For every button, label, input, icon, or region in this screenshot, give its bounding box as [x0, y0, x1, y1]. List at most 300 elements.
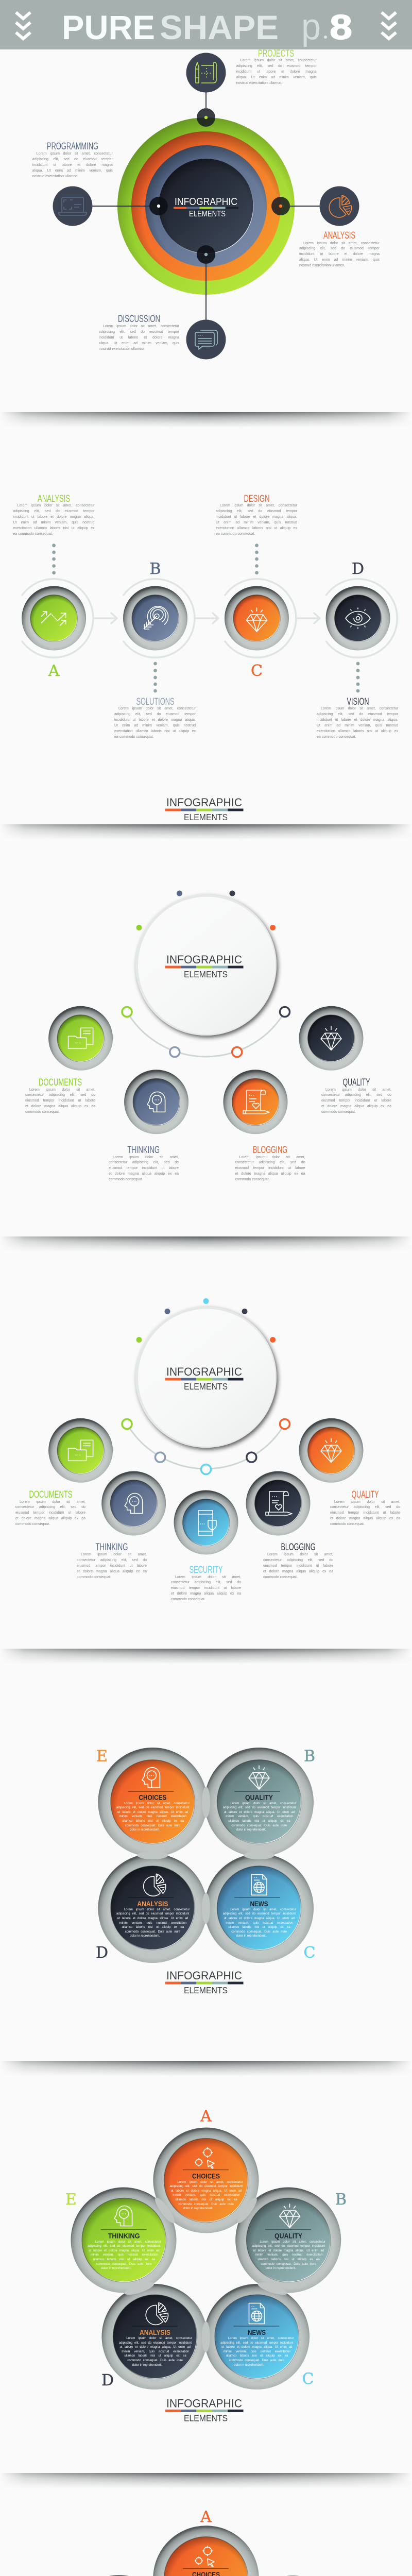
dotted connector D	[356, 662, 359, 692]
text: projects: nostrud exercitation ullamco.	[236, 81, 282, 85]
letter E: E	[96, 1748, 108, 1765]
marker dots	[136, 1298, 276, 1343]
heading: solutions: SOLUTIONS	[136, 697, 174, 707]
text: quality: Lorem ipsum dolor sit amet,	[325, 1088, 391, 1091]
text: analysis: commodo consequat. Duis aute irure	[125, 1930, 180, 1934]
text: thinking: et dolore magna aliqua aliquip ex ea	[77, 1570, 147, 1573]
icon node: programming	[53, 187, 93, 226]
text: design: adipiscing elit, sed do eiusmod tempor	[216, 510, 297, 513]
text: documents	[15, 1500, 85, 1526]
text: projects	[236, 59, 317, 85]
letter D: D	[101, 2371, 114, 2389]
text: analysis: Lorem ipsum dolor sit amet, consectetur	[18, 504, 95, 507]
circle: security	[174, 1490, 238, 1555]
text: choices: ut labore et dolore magna aliqua. Ut enim ad	[171, 2190, 242, 2193]
text: programming: Lorem ipsum dolor sit amet, consectetur	[37, 152, 113, 156]
text: analysis: exercitation ullamco laboris nisi ut aliquip ex	[13, 527, 95, 530]
text: blogging: eiusmod tempor incididunt ut labore	[263, 1564, 333, 1568]
text: security: eiusmod tempor incididunt ut labore	[171, 1586, 241, 1590]
panel: four joined circles: Lorem ipsum dolor sit amet, consectetur	[230, 1908, 296, 1911]
text: thinking	[88, 2240, 161, 2270]
text: news: minim veniam, quis nostrud exercitation	[226, 1922, 293, 1925]
text: analysis	[299, 241, 380, 267]
text: solutions	[114, 707, 196, 739]
text: documents	[25, 1088, 95, 1114]
letter D: D	[96, 1944, 108, 1962]
text: documents: commodo consequat.	[25, 1110, 60, 1114]
text: choices: commodo consequat. Duis aute irure	[178, 2203, 234, 2206]
circle: choices	[164, 2537, 248, 2576]
text: design: ea commodo consequat.	[216, 532, 255, 536]
joined ring frame	[98, 1748, 314, 1963]
step C circle	[225, 579, 296, 657]
logo: ELEMENTS	[184, 812, 228, 822]
text: thinking: commodo consequat.	[109, 1178, 143, 1181]
letter B: B	[149, 560, 161, 578]
heading: security: SECURITY	[190, 1565, 223, 1575]
circle: thinking: THINKING	[108, 2232, 140, 2240]
text: news: ullamco laboris nisi ut aliquip ex ea	[228, 1926, 290, 1929]
circle: quality: QUALITY	[245, 1793, 273, 1802]
text: news: commodo consequat. Duis aute irure	[231, 1930, 287, 1934]
text: documents: Lorem ipsum dolor sit amet,	[20, 1500, 85, 1503]
circle: documents	[48, 1418, 113, 1483]
title: SHAPE	[160, 8, 279, 46]
text: choices: ut labore et dolore magna aliqua. Ut enim ad	[117, 1811, 188, 1814]
icon: right chevrons	[382, 12, 396, 39]
heading: discussion: DISCUSSION	[118, 314, 160, 325]
text: blogging: eiusmod tempor incididunt ut labore	[235, 1166, 305, 1170]
text: security: et dolore magna aliqua aliquip ex ea	[171, 1592, 241, 1596]
heading: design: DESIGN	[244, 494, 270, 504]
heading: documents: DOCUMENTS	[39, 1077, 82, 1088]
text: quality: adipiscing elit, sed do eiusmod tempor incididunt	[223, 1806, 296, 1809]
text: solutions: Lorem ipsum dolor sit amet, consectetur	[118, 707, 196, 710]
text: choices: commodo consequat. Duis aute irure	[125, 1824, 180, 1827]
circle: quality	[217, 1760, 301, 1844]
heading: analysis: ANALYSIS	[38, 494, 70, 504]
heading: documents: DOCUMENTS	[29, 1489, 72, 1500]
text: thinking: et dolore magna aliqua aliquip ex ea	[109, 1172, 179, 1176]
text: quality: ut labore et dolore magna aliqua. Ut enim ad	[253, 2249, 324, 2252]
text: analysis: adipiscing elit, sed do eiusmod tempor incididunt	[116, 1912, 189, 1916]
text: blogging	[263, 1553, 333, 1579]
text: documents: consectetur adipiscing elit, sed do	[25, 1093, 95, 1097]
text: news: adipiscing elit, sed do eiusmod tempor incididunt	[220, 2342, 294, 2345]
circle: blogging	[246, 1471, 310, 1535]
arc rings	[122, 1419, 289, 1475]
circle: quality	[299, 1006, 364, 1071]
connector lines	[92, 92, 320, 320]
text: news: ut labore et dolore magna aliqua. Ut enim ad	[221, 2346, 293, 2349]
text: security	[171, 1575, 241, 1601]
letter C: C	[302, 2370, 314, 2388]
logo	[165, 796, 243, 822]
text: security: Lorem ipsum dolor sit amet,	[175, 1575, 241, 1579]
text: quality: commodo consequat. Duis aute irure	[261, 2263, 316, 2266]
circle: choices: CHOICES	[192, 2172, 220, 2180]
arrow A to B	[94, 613, 117, 623]
heading: projects: PROJECTS	[258, 48, 294, 59]
text: blogging: consectetur adipiscing elit, sed do	[235, 1161, 305, 1164]
text: choices: minim veniam, quis nostrud exercitation	[119, 1815, 186, 1818]
circle: choices: CHOICES	[139, 1793, 166, 1802]
text: quality: ullamco laboris nisi ut aliquip ex ea	[228, 1820, 290, 1823]
text: programming: incididunt ut labore et dolore magna	[32, 163, 113, 167]
panel: four joined circles: dolor in reprehenderit.	[236, 1935, 266, 1938]
text: analysis: incididunt ut labore et dolore magna aliqua.	[13, 515, 95, 519]
circle: thinking	[124, 1070, 188, 1134]
text: analysis: minim veniam, quis nostrud exercitation	[122, 2350, 189, 2353]
icon node: projects	[186, 53, 226, 93]
text: programming	[32, 151, 113, 178]
title: p	[301, 7, 321, 47]
text: discussion	[99, 325, 179, 351]
text: projects: adipiscing elit, sed do eiusmod tempor	[236, 64, 317, 68]
letter B: B	[335, 2191, 347, 2209]
logo	[165, 1365, 243, 1392]
text: solutions: exercitation ullamco laboris nisi ut aliquip ex	[114, 730, 196, 733]
icon node: analysis	[319, 187, 359, 226]
panel: five joined circles: Lorem ipsum dolor sit amet, consectetur	[260, 2240, 325, 2243]
text: quality: commodo consequat.	[330, 1522, 365, 1526]
text: quality: ullamco laboris nisi ut aliquip ex ea	[258, 2258, 320, 2261]
text: analysis: commodo consequat. Duis aute irure	[127, 2359, 183, 2362]
text: blogging: Lorem ipsum dolor sit amet,	[267, 1553, 333, 1556]
logo: INFOGRAPHIC	[166, 2397, 242, 2410]
connecting arc	[127, 1424, 285, 1469]
marker dots	[136, 890, 276, 930]
text: solutions: ea commodo consequat.	[114, 735, 154, 739]
heading: quality: QUALITY	[351, 1489, 379, 1500]
circle: news: NEWS	[250, 1900, 268, 1908]
text: vision: exercitation ullamco laboris nisi ut aliquip ex	[317, 730, 398, 733]
text: thinking: commodo consequat. Duis aute irure	[96, 2263, 152, 2266]
text: analysis: ullamco laboris nisi ut aliquip ex ea	[124, 2354, 186, 2358]
text: projects: Lorem ipsum dolor sit amet, consectetur	[241, 59, 317, 62]
panel: four joined circles	[3, 1649, 409, 1995]
circle: thinking	[82, 2198, 166, 2282]
text: security: consectetur adipiscing elit, sed do	[171, 1581, 241, 1584]
text: solutions: incididunt ut labore et dolore magna aliqua.	[114, 718, 196, 722]
text: analysis: nostrud exercitation ullamco.	[299, 264, 345, 267]
joined ring frame	[66, 2526, 346, 2576]
text: design: Ut enim ad minim veniam, quis nostrud	[216, 521, 297, 524]
panel: four joined circles: Lorem ipsum dolor sit amet, consectetur	[230, 1802, 296, 1805]
letter D: D	[352, 560, 364, 578]
text: thinking	[109, 1155, 179, 1181]
text: documents: eiusmod tempor incididunt ut labore	[25, 1099, 95, 1103]
text: quality: commodo consequat.	[321, 1110, 356, 1114]
text: blogging: Lorem ipsum dolor sit amet,	[239, 1155, 305, 1159]
center logo: ELEMENTS	[189, 210, 226, 218]
step D circle	[325, 579, 397, 657]
circle: documents	[48, 1006, 113, 1071]
letter A: A	[200, 2107, 212, 2126]
text: quality: Lorem ipsum dolor sit amet,	[334, 1500, 400, 1503]
letter A: A	[48, 662, 60, 680]
logo: ELEMENTS	[184, 1985, 228, 1995]
panel: four joined circles: dolor in reprehenderit.	[130, 1935, 160, 1938]
heading: quality: QUALITY	[343, 1077, 370, 1088]
text: news: ut labore et dolore magna aliqua. Ut enim ad	[224, 1917, 295, 1920]
text: blogging: commodo consequat.	[235, 1178, 270, 1181]
text: vision: adipiscing elit, sed do eiusmod tempor	[317, 713, 398, 716]
heading: thinking: THINKING	[127, 1145, 160, 1156]
text: documents: Lorem ipsum dolor sit amet,	[29, 1088, 95, 1091]
letter C: C	[251, 662, 263, 680]
text: thinking: ullamco laboris nisi ut aliquip ex ea	[93, 2258, 155, 2261]
text: thinking	[77, 1553, 147, 1579]
heading: programming: PROGRAMMING	[47, 141, 98, 152]
text: thinking: consectetur adipiscing elit, sed do	[109, 1161, 179, 1164]
circle: thinking	[101, 1471, 166, 1535]
text: analysis: adipiscing elit, sed do eiusmod tempor	[299, 247, 380, 250]
circle: analysis: ANALYSIS	[140, 2328, 170, 2336]
text: quality: et dolore magna aliqua aliquip ex ea	[321, 1105, 391, 1108]
text: news	[222, 1908, 296, 1938]
panel: six joined circles	[3, 2473, 409, 2576]
text: solutions: adipiscing elit, sed do eiusmod tempor	[114, 713, 196, 716]
text: documents: commodo consequat.	[15, 1522, 50, 1526]
text: choices	[170, 2180, 243, 2210]
text: discussion: Lorem ipsum dolor sit amet, consectetur	[103, 325, 179, 328]
panel: five joined circles: dolor in reprehenderit.	[183, 2207, 213, 2210]
text: programming: aliqua. Ut enim ad minim veniam, quis	[32, 169, 113, 173]
text: thinking: minim veniam, quis nostrud exercitation	[91, 2253, 158, 2257]
heading: blogging: BLOGGING	[281, 1542, 315, 1553]
central disk	[135, 894, 277, 1036]
text: quality: minim veniam, quis nostrud exercitation	[255, 2253, 322, 2257]
text: analysis: adipiscing elit, sed do eiusmod tempor	[13, 510, 95, 513]
text: quality: et dolore magna aliqua aliquip ex ea	[330, 1517, 400, 1520]
text: programming: nostrud exercitation ullamco.	[32, 175, 78, 178]
text: quality: commodo consequat. Duis aute irure	[231, 1824, 287, 1827]
panel: four joined circles: Lorem ipsum dolor sit amet, consectetur	[124, 1908, 190, 1911]
text: blogging: et dolore magna aliqua aliquip ex ea	[235, 1172, 305, 1176]
text: analysis: Ut enim ad minim veniam, quis nostrud	[13, 521, 95, 524]
text: documents: eiusmod tempor incididunt ut labore	[15, 1511, 85, 1515]
text: thinking: Lorem ipsum dolor sit amet,	[81, 1553, 147, 1556]
text: design: incididunt ut labore et dolore magna aliqua.	[216, 515, 297, 519]
dotted connector A	[52, 544, 56, 574]
logo	[165, 2397, 243, 2423]
text: quality: ut labore et dolore magna aliqua. Ut enim ad	[224, 1811, 295, 1814]
text: news: minim veniam, quis nostrud exercitation	[224, 2350, 290, 2353]
text: thinking: eiusmod tempor incididunt ut labore	[77, 1564, 147, 1568]
circle: news: NEWS	[248, 2328, 266, 2336]
node: left	[149, 197, 168, 215]
logo: ELEMENTS	[184, 2413, 228, 2423]
center logo: INFOGRAPHIC	[175, 196, 237, 208]
circle: choices	[164, 2138, 248, 2223]
text: quality	[321, 1088, 391, 1114]
panel: five joined circles: Lorem ipsum dolor sit amet, consectetur	[95, 2240, 161, 2243]
dotted connector C	[255, 544, 259, 574]
text: discussion: incididunt ut labore et dolore magna	[99, 336, 179, 340]
panel: five joined circles: dolor in reprehenderit.	[101, 2267, 131, 2270]
node: top	[197, 108, 215, 127]
text: thinking: commodo consequat.	[77, 1575, 111, 1579]
text: discussion: adipiscing elit, sed do eiusmod tempor	[99, 330, 179, 334]
text: analysis	[116, 1908, 190, 1938]
letter B: B	[304, 1748, 315, 1765]
text: blogging	[235, 1155, 305, 1181]
panel: five joined circles: Lorem ipsum dolor sit amet, consectetur	[177, 2180, 243, 2183]
text: security: commodo consequat.	[171, 1598, 205, 1601]
circle: analysis: ANALYSIS	[137, 1900, 168, 1908]
text: design: exercitation ullamco laboris nisi ut aliquip ex	[216, 527, 297, 530]
text: blogging: consectetur adipiscing elit, sed do	[263, 1558, 333, 1562]
circle: analysis	[113, 2295, 197, 2379]
panel: five joined circles: dolor in reprehenderit.	[234, 2364, 264, 2367]
text: choices: adipiscing elit, sed do eiusmod tempor incididunt	[116, 1806, 189, 1809]
icon: left chevrons	[16, 12, 30, 39]
node: bottom	[197, 245, 215, 264]
panel: five joined circles: Lorem ipsum dolor sit amet, consectetur	[228, 2337, 294, 2340]
title	[62, 7, 352, 47]
logo	[165, 953, 243, 979]
text: news	[220, 2337, 294, 2367]
circle: quality	[299, 1418, 364, 1483]
text: analysis	[13, 504, 95, 536]
dotted connector B	[153, 662, 157, 692]
letter C: C	[304, 1944, 315, 1962]
text: quality: consectetur adipiscing elit, sed do	[330, 1505, 400, 1509]
step A circle	[22, 579, 93, 657]
text: thinking: Lorem ipsum dolor sit amet,	[113, 1155, 179, 1159]
text: blogging: et dolore magna aliqua aliquip ex ea	[263, 1570, 333, 1573]
panel: four item arc	[3, 824, 409, 1181]
text: news: ullamco laboris nisi ut aliquip ex ea	[226, 2354, 288, 2358]
logo	[165, 1969, 243, 1995]
circle: blogging	[224, 1070, 287, 1134]
text: projects: aliqua. Ut enim ad minim veniam, quis	[236, 76, 317, 79]
text: choices: ullamco laboris nisi ut aliquip ex ea	[122, 1820, 184, 1823]
text: thinking: consectetur adipiscing elit, sed do	[77, 1558, 147, 1562]
text: vision: ea commodo consequat.	[317, 735, 356, 739]
text: analysis: ut labore et dolore magna aliqua. Ut enim ad	[117, 1917, 188, 1920]
text: vision: incididunt ut labore et dolore magna aliqua.	[317, 718, 398, 722]
text: analysis: ut labore et dolore magna aliqua. Ut enim ad	[120, 2346, 191, 2349]
letter E: E	[65, 2191, 77, 2209]
connecting arc	[127, 1012, 285, 1057]
text: analysis: incididunt ut labore et dolore magna	[299, 252, 380, 256]
logo: ELEMENTS	[184, 969, 228, 979]
text: choices	[116, 1802, 190, 1832]
text: analysis: adipiscing elit, sed do eiusmod tempor incididunt	[119, 2342, 192, 2345]
title: 8	[330, 8, 352, 47]
panel: five joined circles	[3, 2061, 409, 2423]
text: discussion: nostrud exercitation ullamco.	[99, 347, 145, 351]
arc rings	[122, 1007, 289, 1057]
letter A: A	[200, 2508, 212, 2526]
text: analysis: ullamco laboris nisi ut aliquip ex ea	[122, 1926, 184, 1929]
arrow C to D	[297, 613, 320, 623]
panel: four joined circles: dolor in reprehenderit.	[130, 1828, 160, 1832]
text: choices: adipiscing elit, sed do eiusmod tempor incididunt	[170, 2185, 243, 2188]
heading: blogging: BLOGGING	[253, 1145, 287, 1156]
text: discussion: aliqua. Ut enim ad minim veniam, quis	[99, 342, 179, 345]
text: choices: ullamco laboris nisi ut aliquip ex ea	[175, 2198, 237, 2201]
text: documents: et dolore magna aliqua aliquip ex ea	[15, 1517, 85, 1520]
circle: news	[215, 2295, 299, 2379]
joined ring frame	[71, 2128, 341, 2389]
text: analysis	[118, 2337, 192, 2367]
text: quality: eiusmod tempor incididunt ut labore	[321, 1099, 391, 1103]
text: solutions: Ut enim ad minim veniam, quis nostrud	[114, 724, 196, 727]
text: analysis: minim veniam, quis nostrud exercitation	[119, 1922, 186, 1925]
panel: five item arc	[3, 1236, 409, 1601]
text: documents: et dolore magna aliqua aliquip ex ea	[25, 1105, 95, 1108]
panel: concentric circles	[0, 0, 412, 360]
text: quality: eiusmod tempor incididunt ut labore	[330, 1511, 400, 1515]
heading: thinking: THINKING	[96, 1542, 128, 1553]
text: programming: adipiscing elit, sed do eiusmod tempor	[32, 158, 113, 161]
circle: quality: QUALITY	[274, 2232, 303, 2240]
text: news: adipiscing elit, sed do eiusmod tempor incididunt	[223, 1912, 296, 1916]
center logo	[174, 196, 238, 218]
arrow B to C	[195, 613, 218, 623]
panel: four joined circles: Lorem ipsum dolor sit amet, consectetur	[124, 1802, 190, 1805]
text: vision: Lorem ipsum dolor sit amet, consectetur	[321, 707, 398, 710]
text: projects: incididunt ut labore et dolore magna	[236, 70, 317, 74]
text: vision: Ut enim ad minim veniam, quis nostrud	[317, 724, 398, 727]
central disk	[135, 1307, 277, 1448]
text: thinking: eiusmod tempor incididunt ut labore	[109, 1166, 179, 1170]
panel: four joined circles: dolor in reprehenderit.	[236, 1828, 266, 1832]
text: analysis: ea commodo consequat.	[13, 532, 53, 536]
panel: four step timeline	[3, 412, 409, 822]
logo: INFOGRAPHIC	[166, 1969, 242, 1982]
text: choices: minim veniam, quis nostrud exercitation	[173, 2194, 240, 2197]
text: thinking: adipiscing elit, sed do eiusmod tempor incididunt	[88, 2245, 161, 2248]
icon node: discussion	[186, 319, 226, 360]
text: quality	[330, 1500, 400, 1526]
text: blogging: commodo consequat.	[263, 1575, 298, 1579]
circle: news	[217, 1866, 301, 1950]
header banner	[0, 0, 412, 49]
concentric rings	[117, 117, 295, 295]
logo: INFOGRAPHIC	[166, 1365, 242, 1378]
title: PURE	[62, 8, 155, 46]
text: documents: consectetur adipiscing elit, sed do	[15, 1505, 85, 1509]
heading: vision: VISION	[347, 697, 369, 707]
text: news: commodo consequat. Duis aute irure	[229, 2359, 284, 2362]
text: analysis: aliqua. Ut enim ad minim veniam, quis	[299, 258, 380, 262]
text: quality: consectetur adipiscing elit, sed do	[321, 1093, 391, 1097]
circle: quality	[246, 2198, 331, 2282]
circle: analysis	[111, 1866, 195, 1950]
panel: five joined circles: dolor in reprehenderit.	[266, 2267, 296, 2270]
logo: INFOGRAPHIC	[166, 796, 242, 809]
text: quality: minim veniam, quis nostrud exercitation	[226, 1815, 293, 1818]
text: analysis: Lorem ipsum dolor sit amet, consectetur	[303, 241, 380, 245]
node: right	[271, 197, 290, 215]
circle: choices	[111, 1760, 195, 1844]
logo: INFOGRAPHIC	[166, 953, 242, 966]
panel: five joined circles: Lorem ipsum dolor sit amet, consectetur	[126, 2337, 192, 2340]
text: design: Lorem ipsum dolor sit amet, consectetur	[220, 504, 297, 507]
heading: analysis: ANALYSIS	[323, 230, 355, 241]
text: vision	[317, 707, 398, 739]
text: thinking: ut labore et dolore magna aliqua. Ut enim ad	[89, 2249, 160, 2252]
logo: ELEMENTS	[184, 1381, 228, 1392]
step B circle	[123, 579, 195, 657]
panel: five joined circles: dolor in reprehenderit.	[132, 2364, 162, 2367]
text: design	[216, 504, 297, 536]
text: quality	[222, 1802, 296, 1832]
